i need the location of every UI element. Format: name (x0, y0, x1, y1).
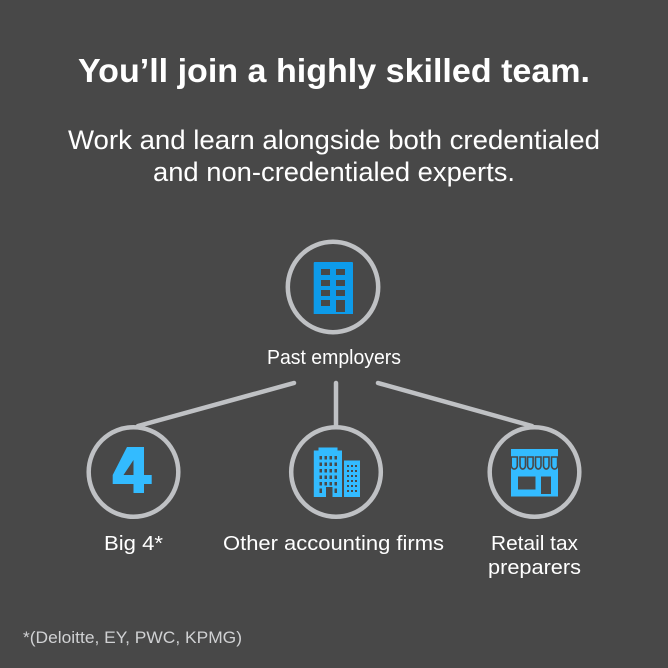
label: retail tax preparers: Retail tax (491, 532, 579, 555)
subtitle: and non-credentialed experts. (153, 157, 515, 187)
subtitle: Work and learn alongside both credentialed (68, 125, 600, 155)
connector: to other accounting firms (334, 383, 338, 426)
connector: to Big 4 (138, 383, 294, 426)
subtitle (68, 125, 600, 187)
footnote: *(Deloitte, EY, PWC, KPMG) (23, 628, 242, 647)
title: You’ll join a highly skilled team. (78, 52, 590, 89)
icon: past employers building (288, 242, 378, 332)
label: other accounting firms: Other accounting firms (223, 532, 444, 555)
icon: other accounting firms (291, 427, 381, 517)
label: retail tax preparers: preparers (488, 556, 581, 579)
connector: to retail tax preparers (378, 383, 532, 426)
label: big 4: Big 4* (104, 532, 163, 555)
icon: retail storefront (490, 427, 579, 517)
label: retail tax preparers (488, 532, 581, 579)
label: past employers: Past employers (267, 346, 401, 369)
icon: big 4 (89, 427, 178, 517)
